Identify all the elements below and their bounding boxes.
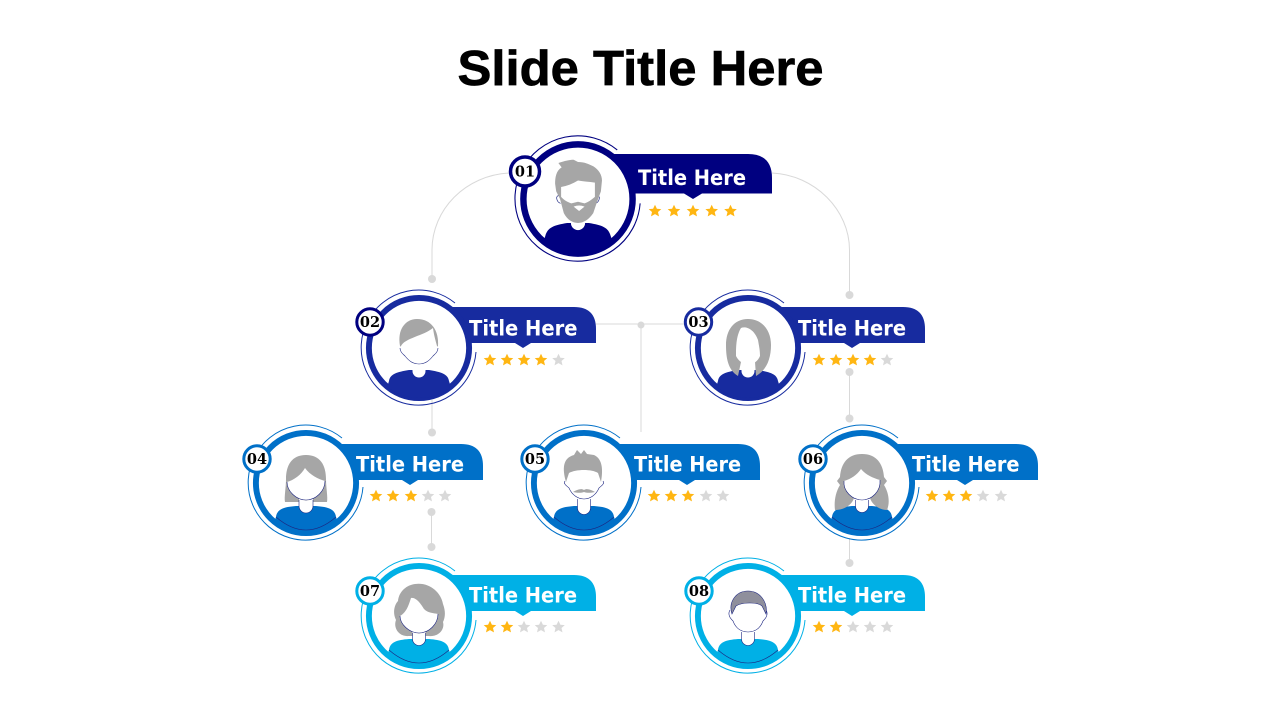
avatar 01: bearded man — [515, 136, 640, 261]
badge 01: 01 — [515, 164, 535, 180]
node 05 — [522, 425, 760, 540]
stars 05 — [648, 490, 729, 501]
stars 04 — [370, 490, 451, 501]
heading 01: Title Here — [638, 166, 746, 190]
stars 01 — [649, 205, 737, 216]
banner 08 — [779, 575, 925, 616]
badge 05: 05 — [525, 451, 545, 468]
banner 07 — [450, 575, 596, 616]
avatar 04: bob-cut woman — [248, 425, 363, 540]
badge 08: 08 — [689, 583, 709, 600]
avatar 03: long-haired woman — [690, 290, 805, 405]
heading 06: Title Here — [912, 452, 1020, 476]
stars 03 — [813, 354, 893, 365]
heading 07: Title Here — [469, 584, 577, 608]
avatar 08: man with side-parted hair — [690, 558, 805, 673]
heading 05: Title Here — [634, 452, 741, 476]
connector lines — [428, 173, 854, 567]
avatar 06: woman with wavy hair — [804, 425, 919, 540]
badge 02 — [357, 309, 383, 335]
node 02 — [357, 290, 596, 405]
node 01 — [510, 136, 772, 261]
badge 05 — [522, 446, 548, 472]
banner 02 — [450, 307, 596, 348]
badge 03: 03 — [688, 314, 709, 331]
node 04 — [244, 425, 483, 540]
badge 02: 02 — [360, 314, 380, 331]
badge 06 — [800, 446, 826, 472]
avatar 05: man with moustache — [526, 425, 641, 540]
banner 01 — [600, 154, 772, 199]
badge 07 — [357, 578, 383, 604]
avatar 02: short-haired man — [361, 290, 476, 405]
badge 08 — [686, 578, 712, 604]
banner 06 — [892, 444, 1038, 485]
heading 02: Title Here — [469, 316, 578, 340]
banner 04 — [337, 444, 483, 485]
node 08 — [686, 558, 925, 673]
node 07 — [357, 558, 596, 673]
stars 07 — [484, 621, 565, 632]
stars 06 — [926, 490, 1007, 501]
badge 04 — [244, 446, 270, 472]
heading 03: Title Here — [798, 316, 906, 340]
banner 05 — [614, 444, 760, 485]
stars 02 — [484, 354, 565, 365]
avatar 07: woman with curly hair — [361, 558, 476, 673]
badge 01 — [510, 157, 540, 186]
stars 08 — [813, 621, 893, 632]
heading 04: Title Here — [356, 452, 464, 476]
title: Slide Title Here — [458, 42, 824, 96]
banner 03 — [779, 307, 925, 348]
badge 06: 06 — [803, 451, 823, 468]
node 06 — [800, 425, 1038, 540]
badge 07: 07 — [360, 583, 380, 600]
heading 08: Title Here — [798, 584, 906, 608]
badge 04: 04 — [247, 451, 267, 468]
node 03 — [685, 290, 925, 405]
badge 03 — [685, 309, 712, 335]
